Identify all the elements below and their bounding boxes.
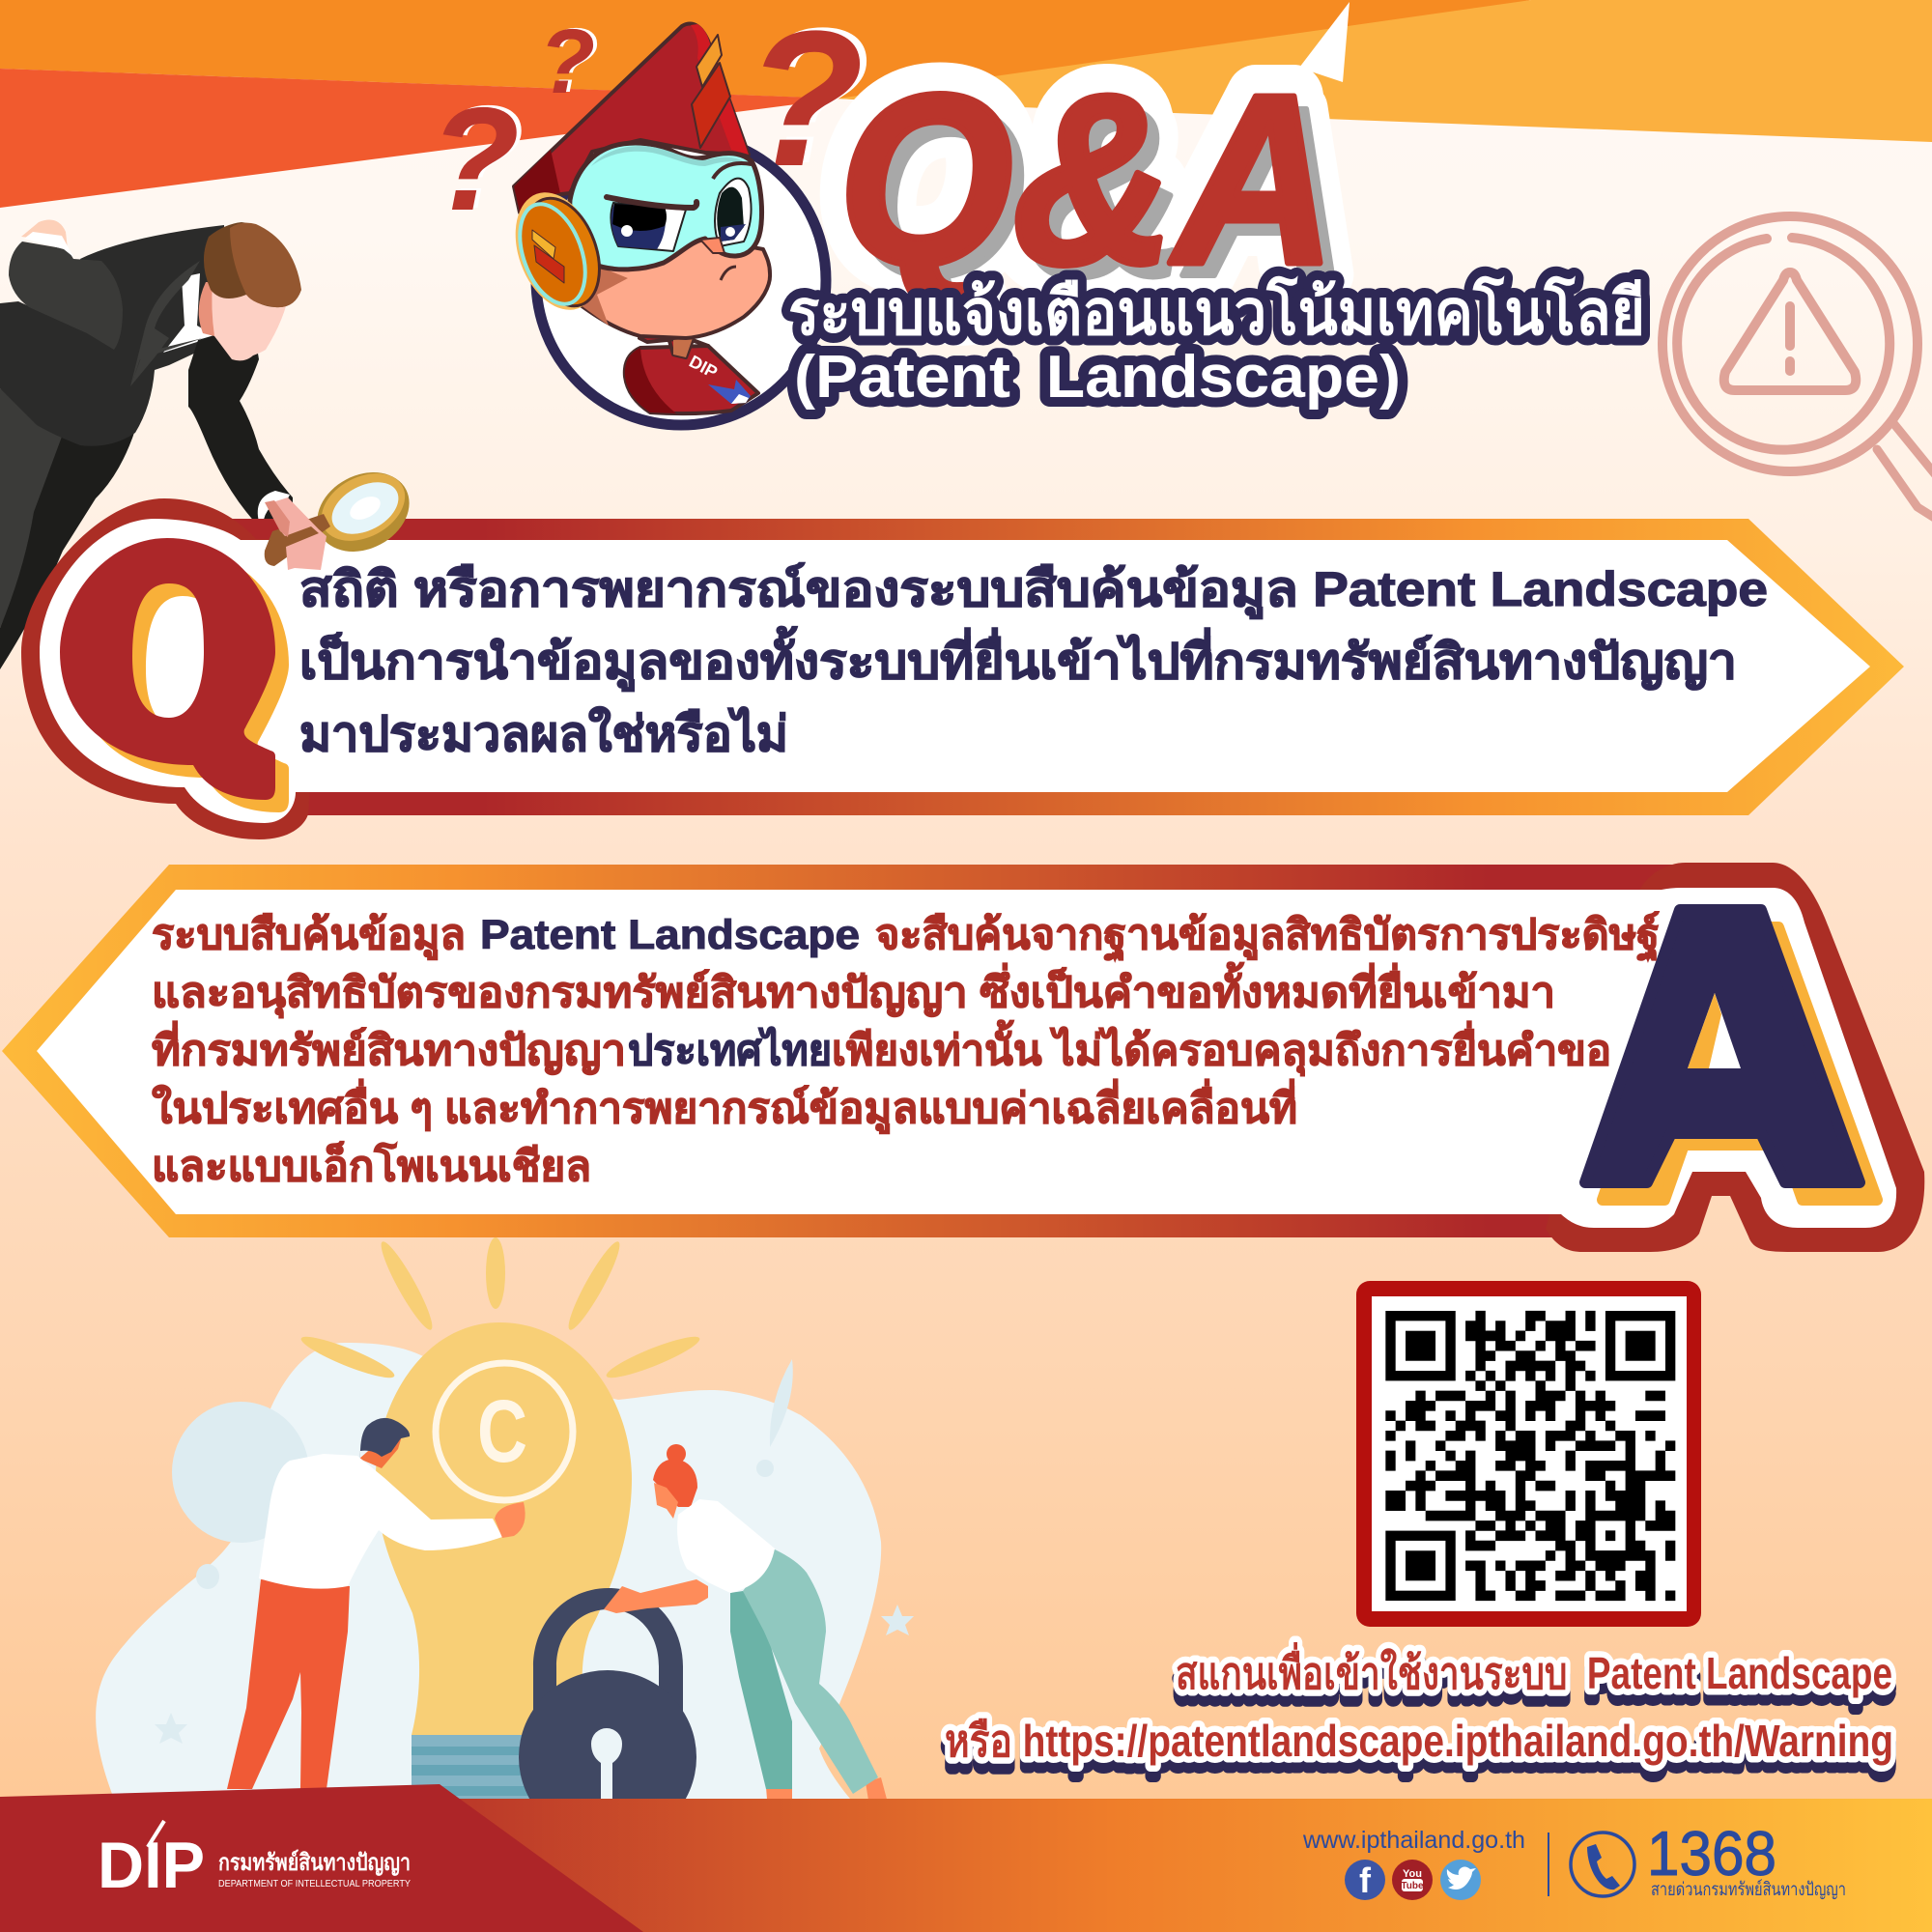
illustration: detective man [0, 220, 301, 669]
mascot ring [536, 135, 826, 425]
copyright symbol [436, 1363, 573, 1500]
decor circles and stars [155, 1359, 914, 1744]
Q&A heading: Q&A [850, 56, 1348, 326]
question marks: ? [435, 75, 525, 240]
answer text: ระบบสืบค้นข้อมูล [152, 912, 466, 960]
logo: DIP: DEPARTMENT OF INTELLECTUAL PROPERTY [218, 1879, 411, 1889]
answer text: ประเทศไทย [628, 1026, 832, 1074]
social icons [1345, 1860, 1481, 1900]
copyright symbol: C [477, 1382, 527, 1481]
Q badge outer [21, 498, 311, 839]
man [227, 1418, 526, 1789]
question text: สถิติ หรือการพยากรณ์ของระบบสืบค้นข้อมูล Patent Landscape [299, 562, 1768, 619]
subtitle: (Patent Landscape) [794, 344, 1401, 411]
answer text: และแบบเอ็กโพเนนเชียล [152, 1141, 591, 1190]
hotline number: 1368 [1647, 1818, 1776, 1889]
answer text: จะสืบค้นจากฐานข้อมูลสิทธิบัตรการประดิษฐ์ [875, 911, 1660, 961]
mascot goggles [570, 143, 762, 270]
letter A [1585, 910, 1877, 1200]
Q&A heading: Q&A [851, 57, 1349, 327]
icon: phone [1571, 1833, 1634, 1896]
answer text: ที่กรมทรัพย์สินทางปัญญา [152, 1021, 626, 1075]
answer text: เพียงเท่านั้น ไม่ได้ครอบคลุมถึงการยื่นคำขอ [832, 1019, 1611, 1077]
question panel border [213, 519, 1904, 815]
background blob [96, 1343, 881, 1799]
answer text: และอนุสิทธิบัตรของกรมทรัพย์สินทางปัญญา ซึ่งเป็นคำขอทั้งหมดที่ยื่นเข้ามา [152, 961, 1555, 1019]
illustration: mascot [500, 24, 826, 425]
question marks: ? [543, 10, 599, 112]
answer text [152, 911, 1660, 1190]
answer panel border [2, 865, 1700, 1237]
answer text: Patent Landscape [480, 912, 860, 958]
mascot headphone [500, 181, 614, 322]
divider [1548, 1833, 1549, 1896]
Q&A heading: Q&A [838, 44, 1336, 314]
mascot eyes [611, 203, 686, 251]
website: www.ipthailand.go.th [1302, 1827, 1525, 1854]
panel: question [21, 498, 1904, 839]
question marks: ? [430, 77, 520, 242]
contact block [1302, 1818, 1846, 1900]
icon: warning magnifier [1662, 216, 1932, 519]
Q&A heading: Q&A [838, 44, 1336, 314]
answer panel fill [37, 888, 1896, 1228]
header ribbons [0, 0, 1932, 208]
question marks [430, 0, 870, 242]
question text [299, 562, 1768, 761]
mascot face [577, 239, 770, 338]
icon: magnifying glass in hand [265, 457, 423, 570]
woman [604, 1444, 889, 1811]
padlock [519, 1588, 696, 1844]
question text: มาประมวลผลใช่หรือไม่ [299, 706, 788, 761]
footer band [0, 1784, 1932, 1932]
logo: DIP [98, 1821, 411, 1902]
mascot body [625, 321, 758, 413]
lightbulb [376, 1322, 632, 1735]
social icons: f [1359, 1861, 1372, 1900]
logo: DIP: กรมทรัพย์สินทางปัญญา [218, 1849, 411, 1876]
A badge outer [1546, 863, 1924, 1252]
letter Q [60, 538, 289, 812]
mascot body: DIP [686, 352, 721, 383]
bulb rays [298, 1237, 703, 1384]
QR code [1356, 1281, 1701, 1627]
question marks: ? [539, 11, 595, 113]
bulb screw base [412, 1735, 533, 1799]
subtitle [788, 274, 1645, 411]
social icons: Tube [1401, 1881, 1424, 1891]
QR caption [945, 1642, 1893, 1776]
panel: answer [2, 863, 1924, 1252]
question text: เป็นการนำข้อมูลของทั้งระบบที่ยื่นเข้าไปที่กรมทรัพย์สินทางปัญญา [299, 626, 1737, 692]
subtitle: ระบบแจ้งเตือนแนวโน้มเทคโนโลยี [788, 274, 1645, 348]
hotline caption: สายด่วนกรมทรัพย์สินทางปัญญา [1651, 1879, 1846, 1900]
question panel fill [40, 519, 1870, 823]
illustration: lightbulb team [96, 1237, 914, 1844]
mascot hat [514, 24, 749, 213]
logo: DIP: DIP [98, 1829, 205, 1902]
social icons: You [1403, 1868, 1422, 1880]
answer text: ในประเทศอื่น ๆ และทำการพยากรณ์ข้อมูลแบบค่าเฉลี่ยเคลื่อนที่ [152, 1079, 1297, 1134]
